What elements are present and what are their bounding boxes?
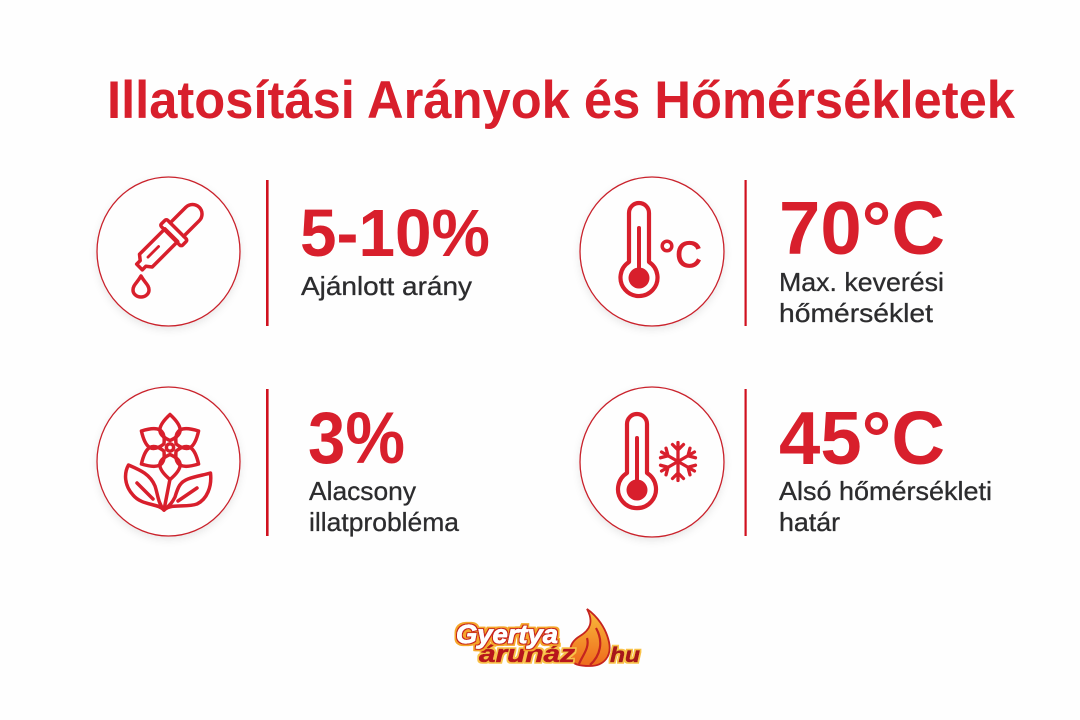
icon: flower [97,387,240,536]
icon: flame [570,609,610,666]
label line 2: hőmérséklet [779,298,934,328]
divider [744,180,747,326]
panel: low scent problem [97,387,460,537]
icon: thermometer snowflake [580,387,724,537]
label: low scent problem: Alacsony [309,476,416,506]
stat: 45°C: 45°C [779,396,945,480]
icon: thermometer celsius: C [676,234,702,275]
panel: lower temperature limit [580,387,992,537]
logo word: hu: hu [610,644,640,667]
divider [744,389,747,536]
panel: max mixing temperature [580,177,945,328]
stat: 5-10%: 5-10% [300,196,490,271]
logo: Gyertya áruház [456,609,640,668]
title: Illatosítási Arányok és Hőmérsékletek [107,71,1015,130]
label line 2: határ [779,507,840,537]
label: max mixing temperature: Max. keverési [779,267,944,297]
logo word: áruház: áruház [479,641,575,668]
panel: recommended ratio [97,177,490,326]
label line 2: illatprobléma [309,507,460,537]
label: recommended ratio: Ajánlott arány [301,271,472,301]
label: lower temperature limit: Alsó hőmérsékleti [779,476,992,506]
stat: 3%: 3% [308,398,405,479]
stat: 70°C: 70°C [779,186,945,270]
divider [266,389,269,536]
icon: dropper [97,177,240,326]
logo word: Gyertya: Gyertya [456,619,558,649]
icon: thermometer celsius [580,177,724,326]
divider [266,180,269,326]
